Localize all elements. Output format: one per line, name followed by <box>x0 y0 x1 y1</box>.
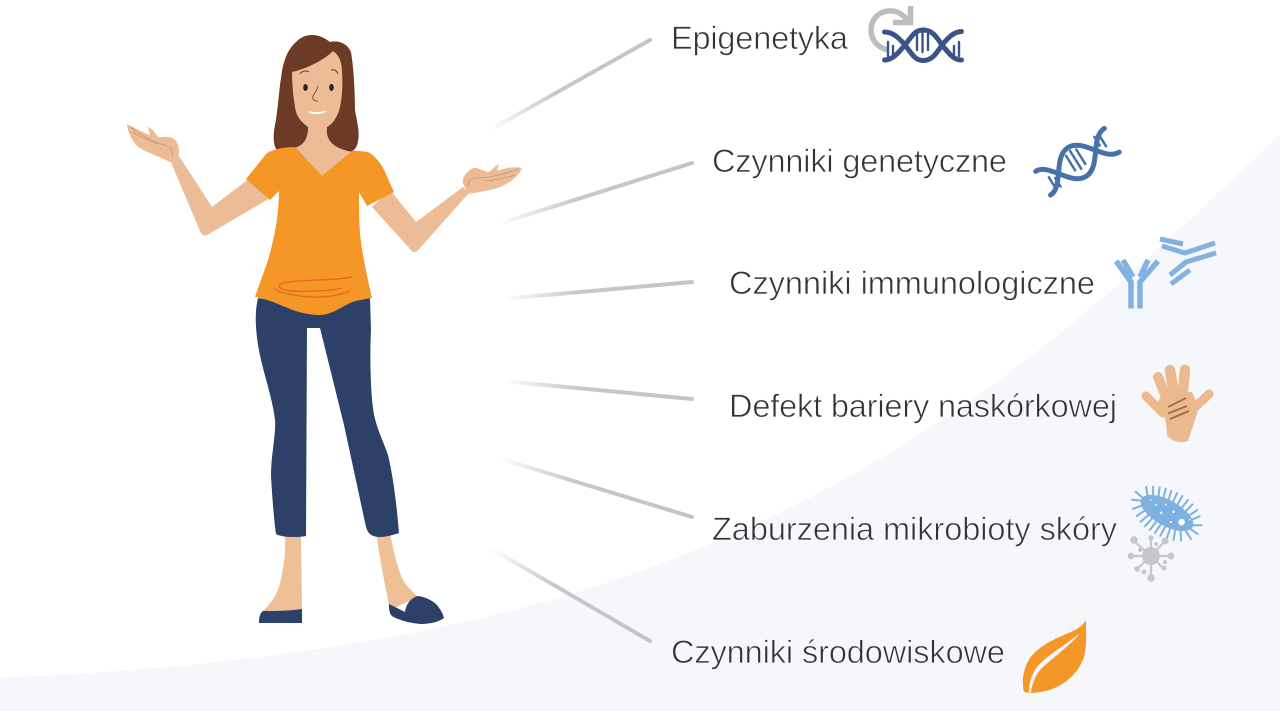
icon: virus <box>1128 535 1174 582</box>
cilia <box>1123 475 1210 551</box>
DNA helix <box>884 30 962 60</box>
antibody rotated <box>1160 239 1216 284</box>
skin lesion lines <box>1168 398 1189 419</box>
facial features <box>300 70 338 114</box>
shirt <box>246 147 394 315</box>
right shoe <box>389 596 444 624</box>
left shoe <box>259 609 302 623</box>
label: Czynniki środowiskowe: Czynniki środowiskowe <box>671 634 1005 670</box>
right hand lines <box>468 169 519 187</box>
left hand lines <box>130 127 172 157</box>
circular arrow <box>871 6 910 50</box>
palm and fingers <box>1146 370 1209 413</box>
left hand <box>127 124 179 162</box>
icon: leaf <box>1023 620 1086 693</box>
neck <box>294 118 353 178</box>
shirt folds <box>274 277 352 297</box>
right hand <box>463 164 522 194</box>
label: Zaburzenia mikrobioty skóry: Zaburzenia mikrobioty skóry <box>712 511 1118 547</box>
right arm <box>372 187 469 252</box>
icon: DNA helix <box>1034 126 1121 198</box>
left arm <box>170 156 270 235</box>
leaf vein <box>1029 633 1080 692</box>
label: Defekt bariery naskórkowej: Defekt bariery naskórkowej <box>729 388 1117 424</box>
icon: antibodies <box>1116 239 1216 308</box>
face <box>292 51 342 128</box>
hair <box>274 35 359 152</box>
body <box>1135 488 1199 538</box>
leaf blade <box>1023 620 1086 693</box>
woman figure <box>127 35 522 624</box>
icon: hand <box>1146 370 1209 442</box>
antibody vertical <box>1116 260 1158 308</box>
icon: bacterium <box>1123 475 1210 551</box>
icon: epigenetics DNA with arrow <box>871 6 962 60</box>
trousers <box>256 298 399 537</box>
label: Czynniki genetyczne: Czynniki genetyczne <box>712 143 1007 179</box>
label: Epigenetyka: Epigenetyka <box>671 20 849 56</box>
label: Czynniki immunologiczne: Czynniki immunologiczne <box>729 265 1095 301</box>
organelles <box>1145 496 1192 531</box>
legs <box>262 532 418 612</box>
connector lines <box>490 40 692 641</box>
